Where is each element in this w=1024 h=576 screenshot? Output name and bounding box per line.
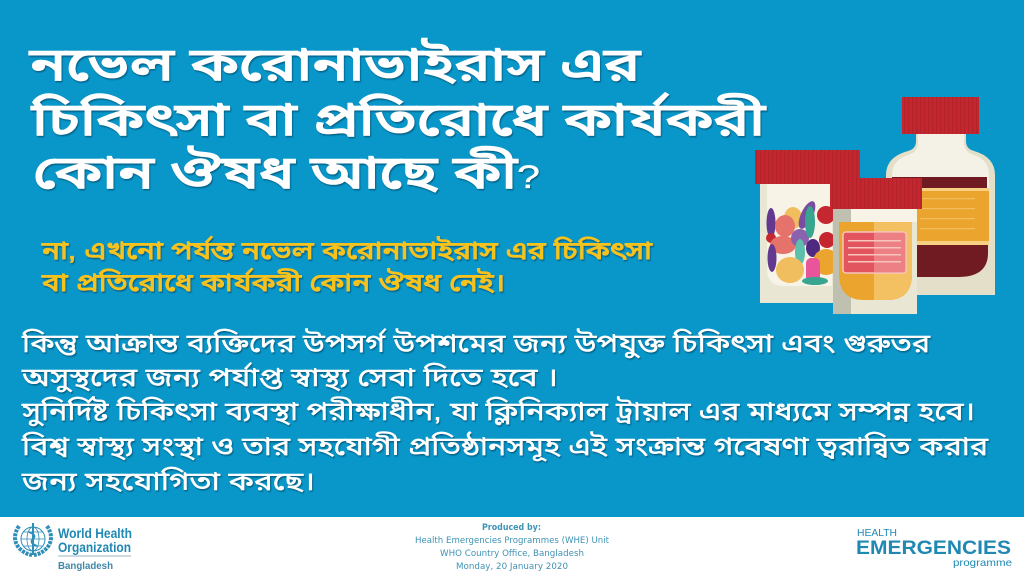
text block: production credits: WHO Country Office, Bangladesh: [440, 549, 584, 559]
text block: production credits: Monday, 20 January 2020: [456, 562, 568, 572]
panel: white footer: [0, 517, 1024, 576]
icon: large back bottle: [886, 97, 995, 295]
title: চিকিৎসা বা প্রতিরোধে কার্যকরী: [31, 92, 766, 145]
text block: body paragraph: অসুস্থদের জন্য পর্যাপ্ত স্বাস্থ্য সেবা দিতে হবে ।: [21, 362, 558, 392]
text block: body paragraph: জন্য সহযোগিতা করছে।: [21, 466, 315, 496]
heading: Health Emergencies programme logotype: HEALTH: [857, 527, 897, 539]
heading: World Health Organization logotype: Bangladesh: [58, 560, 113, 572]
icon: front jar: [830, 178, 922, 314]
callout: yellow answer text: বা প্রতিরোধে কার্যকরী কোন ঔষধ নেই।: [41, 267, 505, 297]
text block: production credits: Produced by:: [482, 523, 541, 533]
heading: Health Emergencies programme logotype: [856, 527, 1012, 569]
callout: yellow answer text: [41, 235, 652, 297]
title: নভেল করোনাভাইরাস এর: [29, 38, 641, 90]
callout: yellow answer text: না, এখনো পর্যন্ত নভেল করোনাভাইরাস এর চিকিৎসা: [41, 235, 652, 265]
text block: body paragraph: [21, 328, 989, 496]
icon: WHO logo: [15, 523, 51, 555]
title: কোন ঔষধ আছে কী ?: [33, 146, 540, 198]
heading: World Health Organization logotype: [58, 526, 132, 572]
text block: production credits: [415, 523, 609, 572]
heading: World Health Organization logotype: Organization: [58, 540, 131, 555]
title: [29, 38, 766, 198]
heading: Health Emergencies programme logotype: programme: [953, 557, 1012, 569]
icon: medicine bottles: [755, 97, 995, 314]
text block: body paragraph: কিন্তু আক্রান্ত ব্যক্তিদের উপসর্গ উপশমের জন্য উপযুক্ত চিকিৎসা এবং গুরুতর: [21, 328, 931, 358]
text block: body paragraph: সুনির্দিষ্ট চিকিৎসা ব্যবস্থা পরীক্ষাধীন, যা ক্লিনিক্যাল ট্রায়াল এর মাধ্যমে সম্পন্ন হবে।: [21, 396, 975, 426]
heading: Health Emergencies programme logotype: EMERGENCIES: [856, 538, 1011, 559]
heading: World Health Organization logotype: World Health: [58, 526, 132, 541]
text block: body paragraph: বিশ্ব স্বাস্থ্য সংস্থা ও তার সহযোগী প্রতিষ্ঠানসমূহ এই সংক্রান্ত গবেষণা ত্বরান্বিত করার: [21, 430, 989, 462]
icon: left pill jar: [755, 150, 860, 303]
text block: production credits: Health Emergencies Programmes (WHE) Unit: [415, 536, 609, 546]
